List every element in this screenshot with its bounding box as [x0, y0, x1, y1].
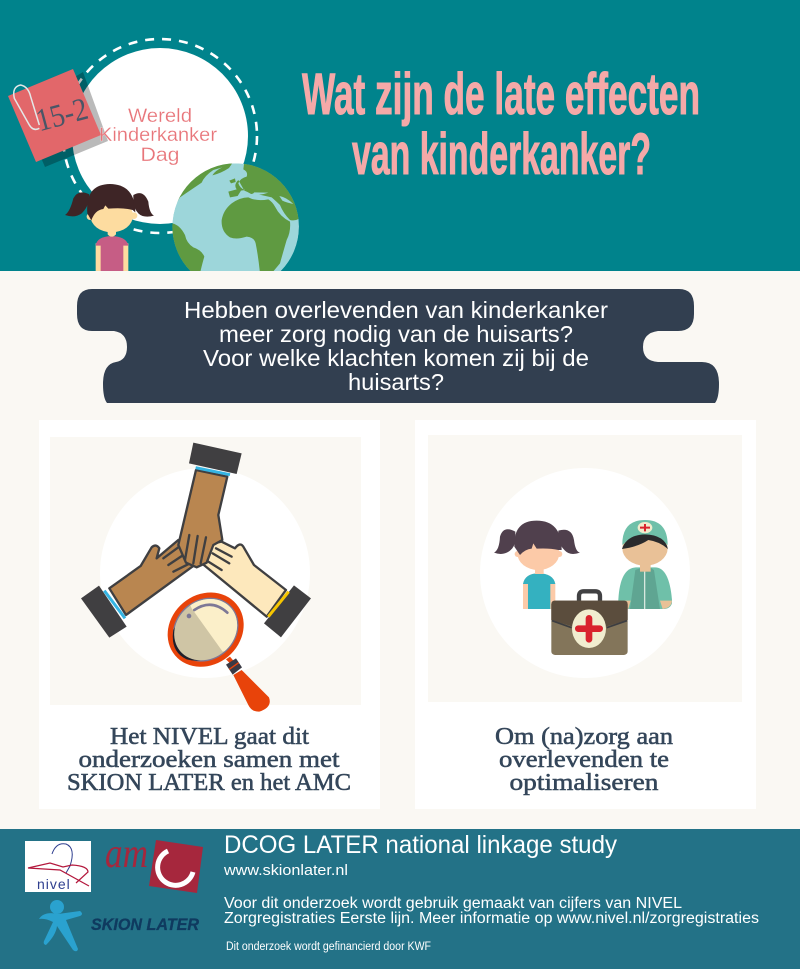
logo: skion later: SKION LATER: [91, 916, 199, 934]
funding note: Dit onderzoek wordt gefinancierd door KWF: [226, 941, 431, 953]
website: www.skionlater.nl: [223, 862, 348, 879]
caption: Om (na)zorg aan: [495, 723, 673, 750]
icon: magnifying glass: [168, 592, 270, 712]
panel: optimising care: [415, 420, 756, 809]
caption: Het NIVEL gaat dit: [110, 723, 309, 750]
event name: Wereld: [128, 105, 192, 127]
icon: girl: [65, 184, 154, 275]
icon: girl: [494, 521, 580, 609]
logo: nivel: [25, 841, 91, 892]
white circle: [72, 48, 248, 224]
question text: huisarts?: [348, 369, 444, 395]
event name: Dag: [140, 144, 180, 166]
study title: DCOG LATER national linkage study: [224, 831, 617, 859]
caption: [495, 723, 673, 796]
logo: skion later: [39, 900, 199, 951]
source note: Voor dit onderzoek wordt gebruik gemaakt van cijfers van NIVEL: [224, 895, 682, 912]
question text: meer zorg nodig van de huisarts?: [219, 321, 573, 347]
panel: footer: [0, 829, 800, 969]
icon: medical bag: [551, 591, 628, 655]
event name: Kinderkanker: [99, 124, 218, 146]
caption: optimaliseren: [510, 769, 658, 796]
icon: globe: [172, 164, 299, 271]
panel: header: [0, 0, 800, 290]
dashed circle: [63, 39, 257, 233]
question text: [184, 297, 608, 395]
logo: amc: am: [105, 831, 148, 877]
caption: overlevenden te: [499, 746, 669, 773]
panel: research partners: [39, 420, 380, 809]
sticky note: [8, 69, 101, 162]
caption: [67, 723, 351, 796]
caption: onderzoeken samen met: [78, 746, 340, 773]
logo: nivel: nivel: [37, 876, 71, 892]
source note: [224, 895, 759, 927]
logo: amc: [105, 831, 203, 893]
icon: paperclip: [14, 85, 39, 129]
question text: Voor welke klachten komen zij bij de: [203, 345, 589, 371]
question text: Hebben overlevenden van kinderkanker: [184, 297, 608, 323]
event name: [99, 105, 218, 166]
source note: Zorgregistraties Eerste lijn. Meer informatie op www.nivel.nl/zorgregistraties: [224, 910, 759, 927]
icon: doctor: [618, 520, 672, 609]
date: 15-2: [32, 90, 92, 138]
title: [302, 71, 698, 175]
ribbon banner: [77, 289, 719, 403]
icon: three hands: [81, 443, 311, 638]
sticky note shadow: [42, 72, 108, 167]
caption: SKION LATER en het AMC: [67, 769, 351, 796]
